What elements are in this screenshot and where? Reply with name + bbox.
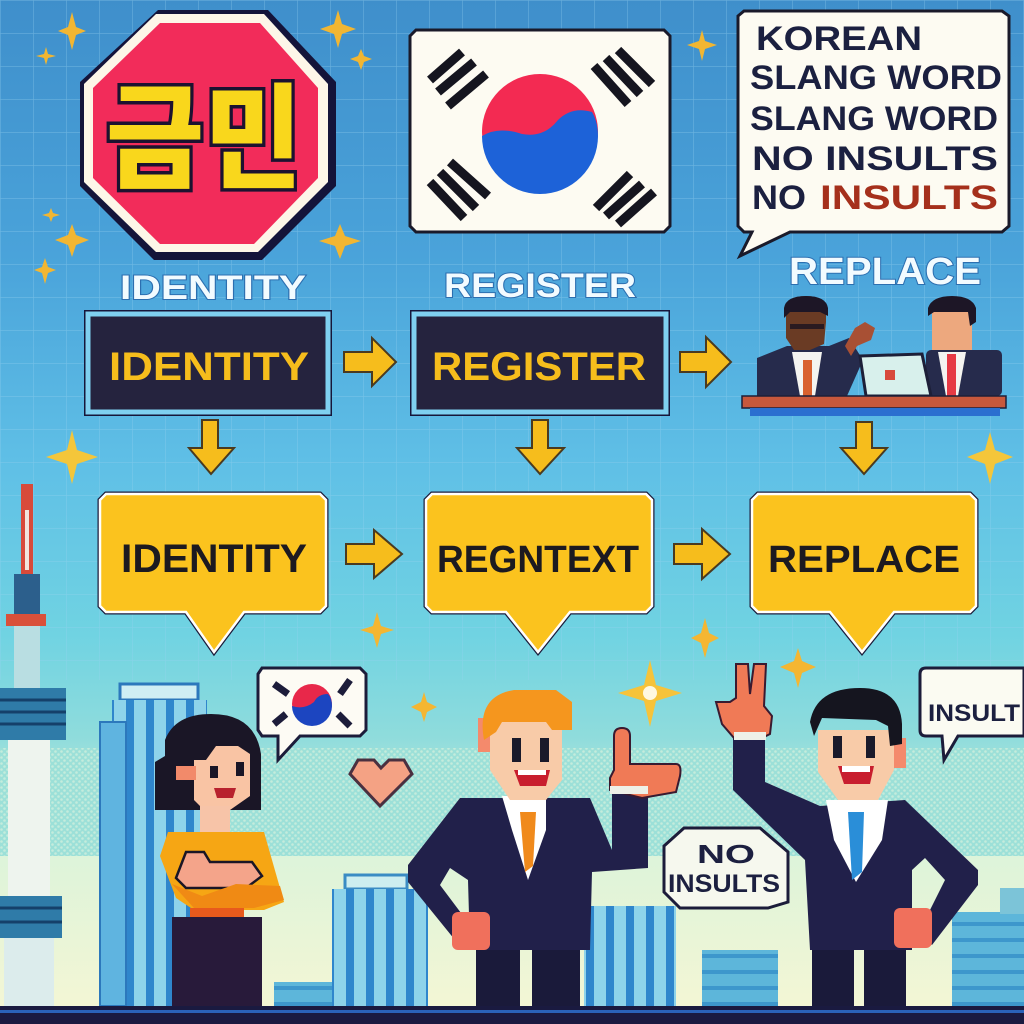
- callout: replace yellow: [752, 494, 976, 652]
- suit: [733, 738, 978, 950]
- text: bubble lines: NO: [752, 179, 806, 217]
- speech bubble: insult: [920, 668, 1024, 760]
- figure: dark-haired man in suit waving: [716, 664, 978, 1006]
- sign: no insults: [664, 828, 788, 908]
- illustration: N Seoul Tower: [0, 484, 66, 1006]
- arrow: top row 2: [680, 337, 731, 387]
- ground line: [0, 1006, 1024, 1024]
- text: bubble lines: INSULTS: [820, 179, 998, 217]
- text: bubble lines: [750, 20, 1002, 217]
- icon: yellow Korean characters: 금민: [106, 47, 302, 212]
- icon: heart: [350, 760, 412, 806]
- panel: Korean flag: [410, 30, 670, 232]
- arrow: down 3: [841, 422, 887, 474]
- head: [478, 690, 572, 800]
- arrow: down 1: [189, 420, 234, 474]
- callout: identity yellow: [100, 494, 326, 652]
- building: far right: [952, 888, 1024, 1006]
- desk: [742, 396, 1006, 416]
- callout: replace yellow: REPLACE: [768, 539, 960, 581]
- callout: identity yellow: IDENTITY: [121, 537, 307, 581]
- heading: register: REGISTER: [444, 267, 636, 305]
- text: bubble lines: NO INSULTS: [752, 140, 998, 178]
- legs: [812, 950, 906, 1006]
- callout: regntext yellow: REGNTEXT: [437, 539, 639, 581]
- hand on hip: [894, 908, 932, 948]
- icon: trigram top left: [430, 52, 486, 106]
- heading: identity: IDENTITY: [120, 269, 306, 307]
- building: mid: [332, 875, 428, 1006]
- legs: [476, 950, 580, 1006]
- illustration: two presenters at desk: [742, 296, 1006, 416]
- shirt and tie: [826, 800, 888, 882]
- box: identity dark: IDENTITY: [109, 345, 309, 389]
- suit: [408, 790, 648, 950]
- sparkles: lower area: [360, 612, 816, 722]
- callout: regntext yellow: [426, 494, 652, 652]
- sign: no insults: INSULTS: [668, 870, 780, 898]
- box: register dark: REGISTER: [432, 345, 646, 389]
- text: bubble lines: SLANG WORD: [750, 100, 998, 138]
- arrow: top row 1: [344, 338, 396, 386]
- icon: trigram bottom right: [596, 174, 654, 224]
- building: small: [274, 982, 332, 1006]
- speech bubble: insult: INSULT: [928, 700, 1020, 727]
- hand peace sign: [716, 664, 772, 738]
- icon: laptop: [860, 354, 931, 396]
- text: bubble lines: KOREAN: [756, 20, 922, 58]
- text: bubble lines: SLANG WORD: [750, 59, 1002, 97]
- panel: slang speech bubble: [738, 11, 1009, 256]
- heading: replace: REPLACE: [789, 251, 981, 293]
- panel: stop sign: [80, 10, 336, 260]
- arrow: lower row 1: [346, 530, 402, 578]
- sparkles: top area: [34, 10, 717, 284]
- figure: left presenter: [757, 296, 875, 396]
- hand on hip: [452, 912, 490, 950]
- icon: taegeuk: [482, 74, 598, 194]
- figure: blond man in suit: [408, 690, 680, 1006]
- hand pointing: [610, 728, 680, 798]
- icon: trigram top right: [594, 50, 652, 104]
- arrow: lower row 2: [674, 529, 730, 579]
- box: register dark: [410, 310, 670, 416]
- building: tall left: [100, 684, 207, 1006]
- box: identity dark: [84, 310, 332, 416]
- figure: woman with crossed arms: [155, 714, 284, 1007]
- figure: right presenter: [926, 296, 1002, 396]
- shirt and tie: [502, 796, 546, 880]
- building: low: [702, 950, 778, 1006]
- sparkle: left: [46, 430, 98, 484]
- skyline: [100, 684, 1024, 1006]
- sparkle: glowing centre: [618, 660, 682, 727]
- head: [810, 688, 906, 800]
- icon: trigram bottom left: [430, 162, 488, 218]
- sign: no insults: NO: [697, 839, 755, 869]
- building: centre right: [584, 906, 676, 1006]
- sparkle: right: [967, 432, 1013, 484]
- speech bubble: flag: [258, 668, 366, 760]
- arrow: down 2: [517, 420, 564, 474]
